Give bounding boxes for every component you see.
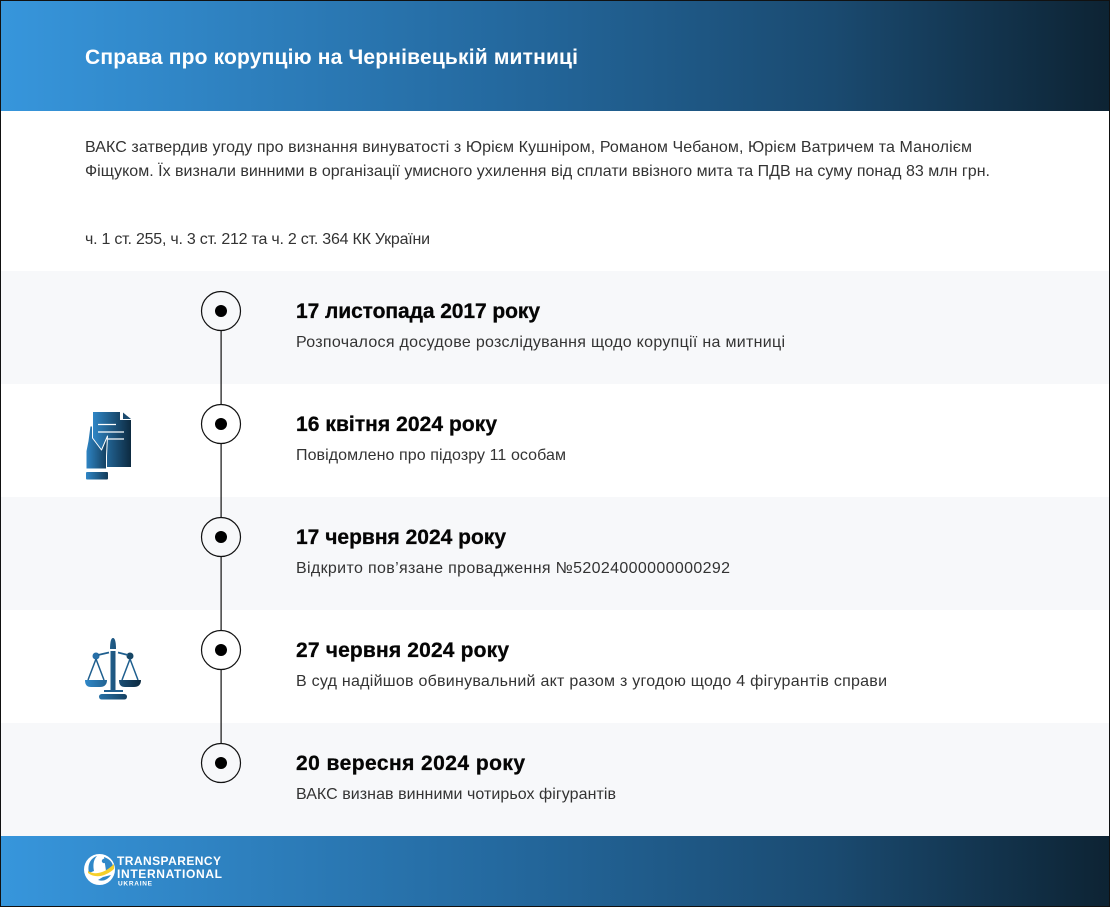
row backgrounds <box>0 271 1110 836</box>
event: 17 червня 2024: 17 червня 2024 року <box>296 526 506 549</box>
event: 27 червня 2024: В суд надійшов обвинувальний акт разом з угодою щодо 4 фігурантів справи <box>296 673 887 690</box>
event: 27 червня 2024 <box>202 630 887 690</box>
event: 17 червня 2024: Відкрито пов’язане провадження №52024000000000292 <box>296 560 730 577</box>
icon: scales of justice <box>85 638 141 700</box>
intro paragraph: Фіщуком. Їх визнали винними в організації умисного ухилення від сплати ввізного мита та ПДВ на суму понад 83 млн грн. <box>85 162 990 180</box>
event: 17 листопада 2017: 17 листопада 2017 року <box>296 300 540 323</box>
event: 17 листопада 2017 <box>202 292 785 351</box>
timeline line <box>220 311 222 763</box>
intro paragraph <box>85 139 990 180</box>
event: 17 червня 2024 <box>202 518 730 577</box>
event: 20 вересня 2024: ВАКС визнав винними чотирьох фігурантів <box>296 786 616 803</box>
icon: hand holding document <box>86 412 131 480</box>
event: 16 квітня 2024: Повідомлено про підозру 11 особам <box>296 447 566 464</box>
logo: Transparency International Ukraine <box>84 854 222 888</box>
legal articles: ч. 1 ст. 255, ч. 3 ст. 212 та ч. 2 ст. 364 КК України <box>85 231 430 248</box>
header banner <box>0 0 1110 111</box>
event: 20 вересня 2024: 20 вересня 2024 року <box>296 752 525 775</box>
event: 27 червня 2024: 27 червня 2024 року <box>296 639 509 662</box>
event: 16 квітня 2024 <box>202 404 566 464</box>
footer banner <box>0 836 1110 907</box>
title: Справа про корупцію на Чернівецькій митниці <box>85 46 578 69</box>
logo: Transparency International Ukraine: INTERNATIONAL <box>117 867 222 881</box>
intro paragraph: ВАКС затвердив угоду про визнання винуватості з Юрієм Кушніром, Романом Чебаном, Юрієм Ватричем та Манолієм <box>85 139 972 156</box>
event: 16 квітня 2024: 16 квітня 2024 року <box>296 413 497 436</box>
event: 20 вересня 2024 <box>202 744 616 803</box>
logo: Transparency International Ukraine: UKRAINE <box>118 880 153 888</box>
logo: Transparency International Ukraine: TRANSPARENCY <box>117 854 221 868</box>
event: 17 листопада 2017: Розпочалося досудове розслідування щодо корупції на митниці <box>296 334 785 351</box>
